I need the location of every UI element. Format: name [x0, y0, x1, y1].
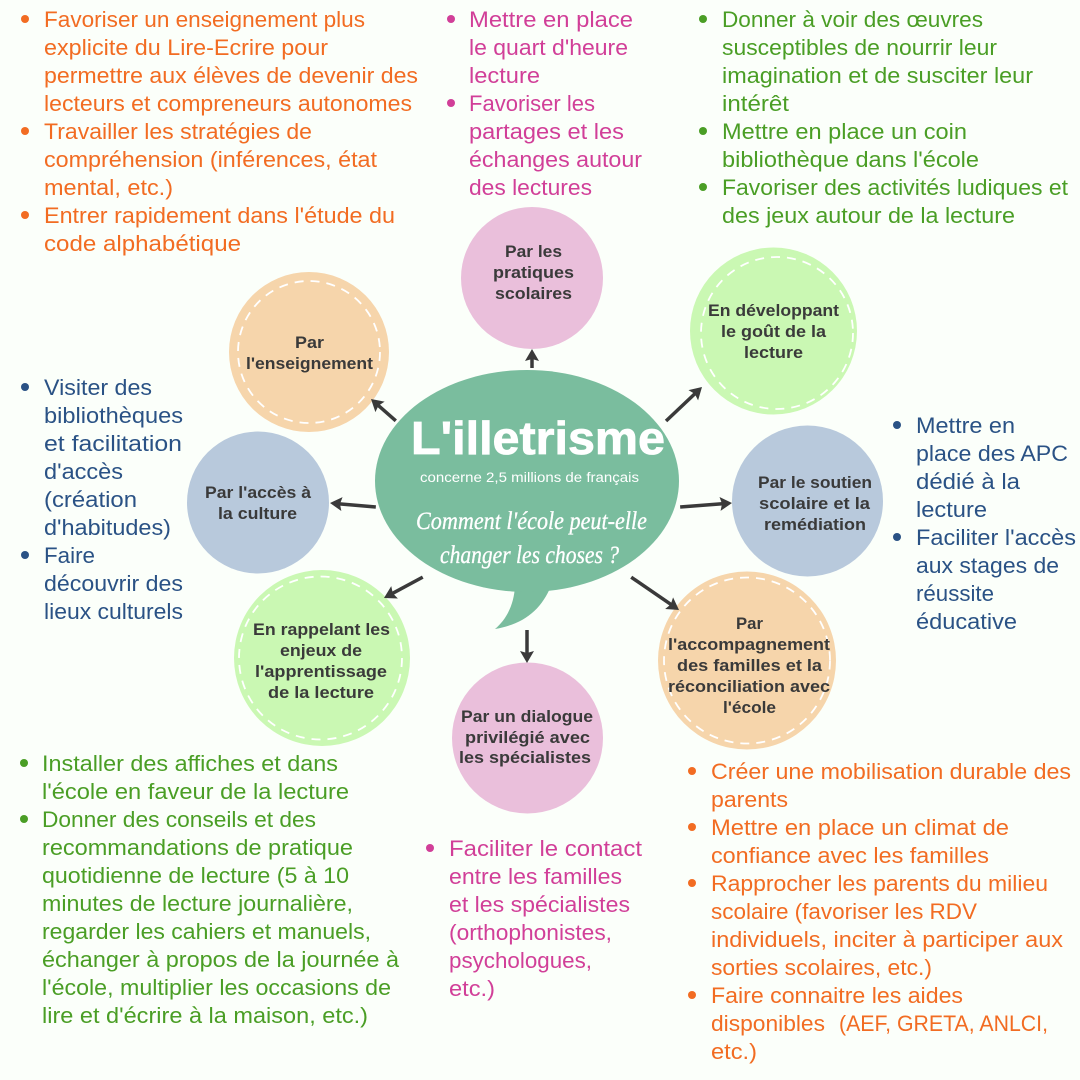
- bubble question: changer les choses ?: [440, 542, 619, 569]
- panel: accès à la culture actions: [21, 375, 183, 624]
- circle: en développant le goût de la lecture: En développant: [708, 302, 840, 320]
- panel: spécialistes actions: [426, 836, 642, 1001]
- circle: par un dialogue privilégié avec les spécialistes: [452, 662, 603, 814]
- item: rapprocher: sorties scolaires, etc.): [711, 955, 932, 980]
- circle: par l'accompagnement des familles: l'école: [723, 699, 776, 717]
- bubble title: L'illetrisme: [411, 412, 665, 464]
- panel: goût de la lecture actions: [699, 7, 1068, 228]
- item: aides: disponibles: [711, 1011, 825, 1036]
- bubble question: [416, 508, 647, 569]
- item: aides: (AEF, GRETA, ANLCI,: [839, 1011, 1048, 1036]
- item: mobilisation: parents: [711, 787, 788, 812]
- circle: par les pratiques scolaires: scolaires: [495, 285, 572, 303]
- circle: en développant le goût de la lecture: le goût de la: [721, 323, 827, 341]
- arrow: to goût de la lecture: [661, 382, 707, 426]
- circle: en rappelant les enjeux: l'apprentissage: [255, 663, 387, 681]
- item: coin bibliothèque: bibliothèque dans l'école: [722, 147, 979, 172]
- item: contact: entre les familles: [449, 864, 622, 889]
- circle: par l'accès à la culture: Par l'accès à: [205, 484, 312, 502]
- item: œuvres: [699, 7, 1033, 116]
- item: affiches: [20, 751, 349, 804]
- item: affiches: l'école en faveur de la lecture: [42, 779, 349, 804]
- item: activités ludiques: [699, 175, 1068, 228]
- circle: par les pratiques scolaires: Par les: [505, 243, 562, 261]
- bubble subtitle: concerne 2,5 millions de français: [420, 470, 639, 485]
- item: rapprocher: Rapprocher les parents du milieu: [711, 871, 1048, 896]
- item: quart d'heure lecture: Mettre en place: [469, 7, 633, 32]
- item: conseils: l'école, multiplier les occasions de: [42, 975, 391, 1000]
- item: rapprocher: scolaire (favoriser les RDV: [711, 899, 977, 924]
- item: mobilisation: Créer une mobilisation durable des: [711, 759, 1071, 784]
- item: mobilisation: [688, 759, 1071, 812]
- item: conseils: échanger à propos de la journée à: [42, 947, 400, 972]
- item: conseils: Donner des conseils et des: [42, 807, 316, 832]
- item: bibliothèques: d'habitudes): [44, 515, 171, 540]
- circle: par le soutien scolaire et la remédiation: scolaire et la: [759, 495, 871, 513]
- item: conseils: [20, 807, 400, 1028]
- circle: par un dialogue privilégié avec les spécialistes: les spécialistes: [459, 749, 591, 767]
- item: stratégies: [21, 119, 377, 200]
- circle: par l'accès à la culture: [187, 432, 329, 574]
- circle: par l'accompagnement des familles: Par: [736, 615, 764, 633]
- arrow: to soutien scolaire: [680, 496, 733, 514]
- item: bibliothèques: (création: [44, 487, 137, 512]
- circle: par l'accès à la culture: la culture: [218, 505, 297, 523]
- item: œuvres: imagination et de susciter leur: [722, 63, 1033, 88]
- central speech bubble: [375, 370, 679, 629]
- item: coin bibliothèque: [699, 119, 979, 172]
- item: contact: Faciliter le contact: [449, 836, 642, 861]
- item: code alphabétique: [21, 203, 395, 256]
- item: contact: (orthophonistes,: [449, 920, 612, 945]
- arrow: to accompagnement des familles: [627, 571, 683, 616]
- arrow: to enseignement: [366, 394, 400, 426]
- item: APC: [893, 413, 1068, 522]
- item: contact: et les spécialistes: [449, 892, 630, 917]
- circle: en rappelant les enjeux: de la lecture: [268, 684, 374, 702]
- circle: par les pratiques scolaires: pratiques: [493, 264, 574, 282]
- item: lieux culturels: lieux culturels: [44, 599, 183, 624]
- arrow: to accès à la culture: [329, 496, 376, 514]
- item: APC: lecture: [916, 497, 987, 522]
- item: conseils: quotidienne de lecture (5 à 10: [42, 863, 349, 888]
- item: contact: [426, 836, 642, 1001]
- item: lire-écrire: Favoriser un enseignement plus: [44, 7, 365, 32]
- item: bibliothèques: bibliothèques: [44, 403, 183, 428]
- item: contact: etc.): [449, 976, 495, 1001]
- item: stratégies: mental, etc.): [44, 175, 173, 200]
- panel: pratiques scolaires actions: [447, 7, 642, 200]
- bubble question: Comment l'école peut-elle: [416, 508, 647, 535]
- circle: en rappelant les enjeux: enjeux de: [280, 642, 362, 660]
- circle: par un dialogue privilégié avec les spécialistes: privilégié avec: [465, 729, 590, 747]
- panel: enjeux actions: [20, 751, 400, 1028]
- item: APC: Mettre en: [916, 413, 1015, 438]
- item: lire-écrire: explicite du Lire-Ecrire pour: [44, 35, 328, 60]
- item: APC: place des APC: [916, 441, 1068, 466]
- circle: en rappelant les enjeux: En rappelant les: [253, 621, 390, 639]
- item: stages: Faciliter l'accès: [916, 525, 1076, 550]
- circle: en développant le goût de la lecture: lecture: [744, 344, 803, 362]
- item: APC: dédié à la: [916, 469, 1021, 494]
- circle: par l'enseignement: l'enseignement: [246, 355, 374, 373]
- item: lire-écrire: [21, 7, 418, 116]
- item: quart d'heure lecture: le quart d'heure: [469, 35, 628, 60]
- circle: par le soutien scolaire et la remédiation: [732, 426, 883, 576]
- item: stratégies: Travailler les stratégies de: [44, 119, 312, 144]
- item: affiches: Installer des affiches et dans: [42, 751, 338, 776]
- item: conseils: regarder les cahiers et manuels,: [42, 919, 371, 944]
- item: bibliothèques: [21, 375, 183, 540]
- item: partages: des lectures: [469, 175, 592, 200]
- item: coin bibliothèque: Mettre en place un coin: [722, 119, 967, 144]
- item: œuvres: intérêt: [722, 91, 789, 116]
- item: aides: [688, 983, 1048, 1064]
- circle: par un dialogue privilégié avec les spécialistes: Par un dialogue: [461, 708, 593, 726]
- item: bibliothèques: Visiter des: [44, 375, 152, 400]
- arrow: to pratiques scolaires: [525, 349, 539, 368]
- item: conseils: recommandations de pratique: [42, 835, 353, 860]
- item: code alphabétique: Entrer rapidement dans l'étude du: [44, 203, 395, 228]
- item: aides: Faire connaitre les aides: [711, 983, 963, 1008]
- item: code alphabétique: code alphabétique: [44, 231, 241, 256]
- circle: par le soutien scolaire et la remédiation: remédiation: [764, 516, 866, 534]
- panel: enseignement actions: [21, 7, 418, 256]
- item: stages: réussite: [916, 581, 994, 606]
- circle: par le soutien scolaire et la remédiation: Par le soutien: [758, 474, 872, 492]
- item: rapprocher: individuels, inciter à participer aux: [711, 927, 1063, 952]
- item: climat de confiance: confiance avec les familles: [711, 843, 989, 868]
- item: œuvres: Donner à voir des œuvres: [722, 7, 983, 32]
- item: climat de confiance: Mettre en place un climat de: [711, 815, 1009, 840]
- item: activités ludiques: Favoriser des activités ludiques et: [722, 175, 1068, 200]
- item: partages: partages et les: [469, 119, 624, 144]
- circle: par les pratiques scolaires: [461, 207, 603, 349]
- circle: en développant le goût de la lecture: [690, 248, 857, 414]
- circle: par l'accompagnement des familles: réconciliation avec: [668, 678, 830, 696]
- item: stages: [893, 525, 1076, 634]
- arrow: to enjeux: [381, 571, 426, 604]
- item: lieux culturels: découvrir des: [44, 571, 183, 596]
- item: quart d'heure lecture: [447, 7, 633, 88]
- item: partages: [447, 91, 642, 200]
- item: partages: Favoriser les: [469, 91, 595, 116]
- item: lire-écrire: permettre aux élèves de devenir des: [44, 63, 418, 88]
- item: œuvres: susceptibles de nourrir leur: [722, 35, 997, 60]
- item: stages: aux stages de: [916, 553, 1059, 578]
- item: rapprocher: [688, 871, 1063, 980]
- arrow: to dialogue spécialistes: [520, 630, 534, 663]
- item: bibliothèques: d'accès: [44, 459, 123, 484]
- item: stages: éducative: [916, 609, 1017, 634]
- item: activités ludiques: des jeux autour de la lecture: [722, 203, 1015, 228]
- item: contact: psychologues,: [449, 948, 592, 973]
- item: lieux culturels: Faire: [44, 543, 95, 568]
- circle: par l'enseignement: [229, 272, 389, 432]
- circle: par l'enseignement: Par: [295, 334, 325, 352]
- item: lire-écrire: lecteurs et compreneurs autonomes: [44, 91, 412, 116]
- circle: en rappelant les enjeux: [234, 570, 410, 746]
- panel: soutien scolaire actions: [893, 413, 1076, 634]
- item: conseils: minutes de lecture journalière,: [42, 891, 353, 916]
- item: partages: échanges autour: [469, 147, 642, 172]
- panel: familles actions: [688, 759, 1071, 1064]
- item: stratégies: compréhension (inférences, état: [44, 147, 377, 172]
- circle: par l'accompagnement des familles: [658, 572, 836, 750]
- circle: par l'accompagnement des familles: des familles et la: [677, 657, 823, 675]
- item: conseils: lire et d'écrire à la maison, etc.): [42, 1003, 368, 1028]
- item: climat de confiance: [688, 815, 1009, 868]
- item: quart d'heure lecture: lecture: [469, 63, 540, 88]
- circle: par l'accompagnement des familles: l'accompagnement: [668, 636, 831, 654]
- item: bibliothèques: et facilitation: [44, 431, 182, 456]
- item: lieux culturels: [21, 543, 183, 624]
- item: aides: etc.): [711, 1039, 757, 1064]
